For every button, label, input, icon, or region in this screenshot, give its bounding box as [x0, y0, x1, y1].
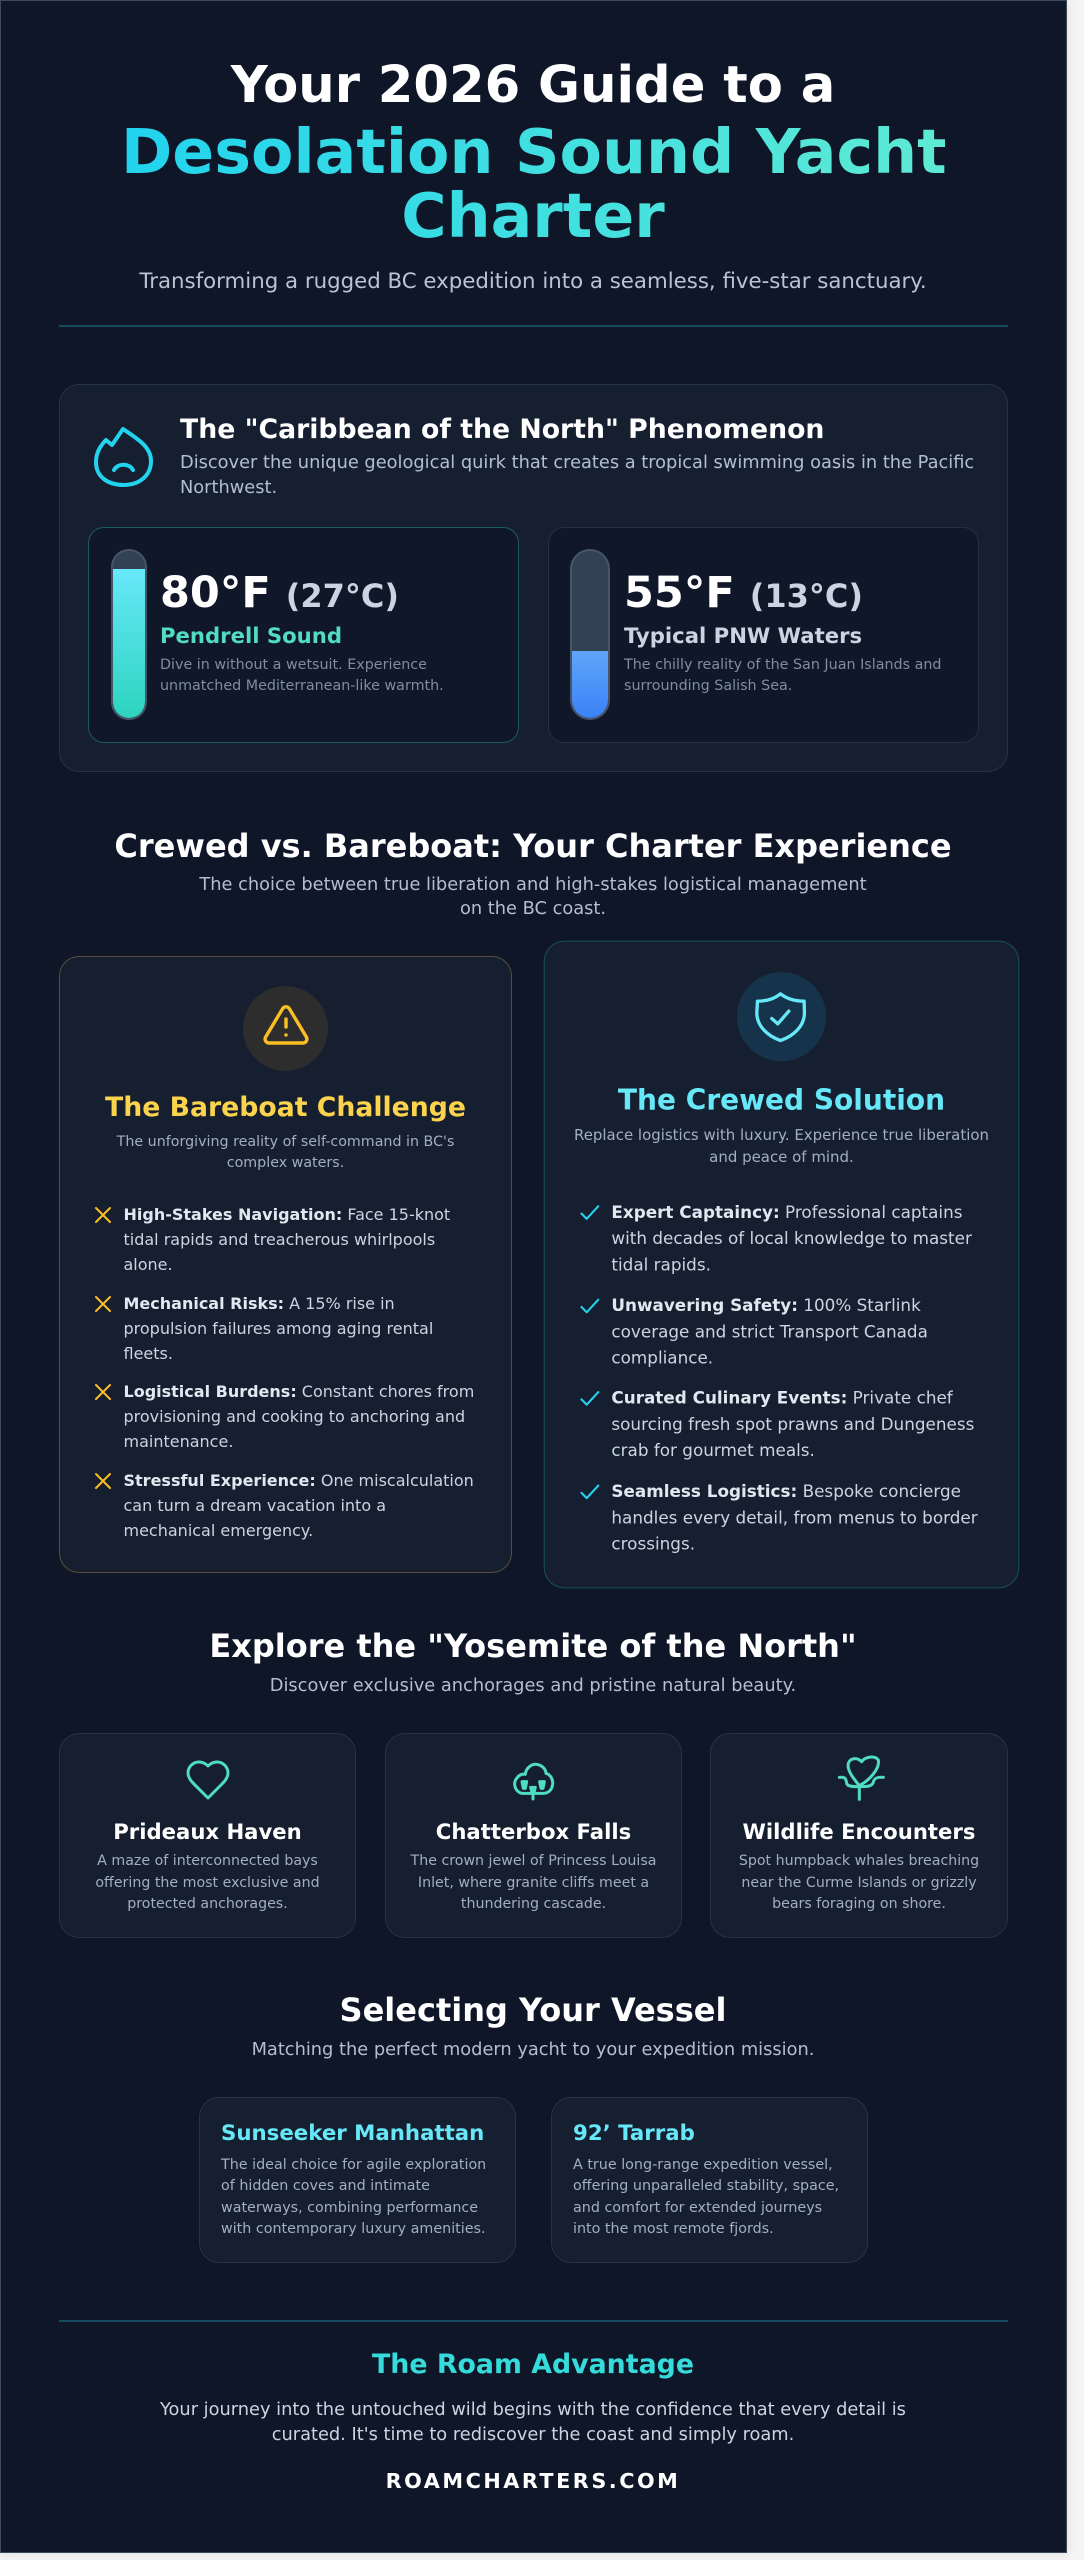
- card description: A maze of interconnected bays: [97, 1853, 318, 1869]
- PNW description: The chilly reality of the San Juan Islands and: [624, 657, 942, 673]
- benefit list: [580, 1202, 978, 1554]
- panel: Prideaux Haven: [59, 1733, 356, 1938]
- vessel description: waterways, combining performance: [221, 2200, 478, 2216]
- item: Seamless Logistics: crossings.: [611, 1534, 695, 1554]
- temperature reading: 55F: 55°F (13°C): [624, 568, 863, 618]
- heading: Selecting Your Vessel: Selecting Your Vessel: [340, 1991, 726, 2029]
- item: Unwavering Safety: Unwavering Safety: 100% Starlink: [611, 1295, 920, 1315]
- item: Curated Culinary Events: [580, 1388, 974, 1461]
- panel: Bareboat Challenge: [59, 956, 512, 1573]
- crewed description: Replace logistics with luxury. Experience true liberation: [573, 1127, 989, 1144]
- item: Mechanical Risks: fleets.: [124, 1344, 173, 1363]
- card description: Inlet, where granite cliffs meet a: [418, 1875, 649, 1891]
- Pendrell description: [160, 657, 444, 694]
- item: High-Stakes Navigation: High-Stakes Navigation: Face 15-knot: [124, 1205, 450, 1224]
- bareboat heading: The Bareboat Challenge: [105, 1092, 466, 1123]
- PNW description: [624, 657, 942, 694]
- phenomenon description: Northwest.: [180, 477, 277, 498]
- icon: warning triangle: [243, 986, 328, 1071]
- vessel description: into the most remote fjords.: [573, 2221, 774, 2237]
- card title: Prideaux Haven: [113, 1819, 302, 1844]
- card description: bears foraging on shore.: [772, 1896, 946, 1912]
- heading: Yosemite of the North: Explore the "Yosemite of the North": [209, 1627, 857, 1665]
- item: Stressful Experience: mechanical emergency.: [124, 1521, 313, 1540]
- phenomenon heading: The "Caribbean of the North" Phenomenon: [180, 414, 824, 445]
- item: Expert Captaincy: with decades of local knowledge to master: [611, 1228, 971, 1248]
- item: High-Stakes Navigation: alone.: [124, 1255, 173, 1274]
- card description: [410, 1853, 656, 1912]
- title gradient: Desolation Sound Yacht Charter: Desolation Sound Yacht: [121, 116, 947, 188]
- footer heading: The Roam Advantage: [372, 2349, 694, 2380]
- panel: Pendrell Sound temperature: [88, 527, 519, 743]
- vessel description: offering unparalleled stability, space,: [573, 2178, 839, 2194]
- item: Curated Culinary Events: sourcing fresh spot prawns and Dungeness: [611, 1415, 974, 1434]
- item: Curated Culinary Events: crab for gourmet meals.: [611, 1441, 814, 1461]
- location: Typical PNW Waters: Typical PNW Waters: [624, 623, 862, 648]
- card description: thundering cascade.: [461, 1896, 606, 1912]
- card description: near the Curme Islands or grizzly: [741, 1875, 977, 1891]
- title line: Your 2026 Guide to a: Your 2026 Guide to a: [231, 55, 835, 115]
- vessel title: Sunseeker Manhattan: [221, 2121, 484, 2146]
- website: ROAMCHARTERS.COM: [386, 2469, 680, 2493]
- bareboat description: complex waters.: [227, 1155, 344, 1171]
- panel: Caribbean of the North phenomenon: [59, 384, 1008, 772]
- item: Logistical Burdens: provisioning and cooking to anchoring and: [124, 1407, 465, 1426]
- item: High-Stakes Navigation: [95, 1205, 450, 1274]
- card description: [739, 1853, 979, 1912]
- Pendrell description: unmatched Mediterranean-like warmth.: [160, 678, 444, 694]
- item: Expert Captaincy: Expert Captaincy: Professional captains: [611, 1202, 962, 1222]
- footer: [160, 2349, 906, 2493]
- vessel title: 92’ Tarrab: [573, 2121, 695, 2146]
- section description: Discover exclusive anchorages and pristine natural beauty.: [270, 1675, 796, 1696]
- vessel description: [220, 2157, 486, 2237]
- phenomenon description: [180, 452, 974, 498]
- item: Seamless Logistics: handles every detail, from menus to border: [611, 1508, 977, 1528]
- section description: on the BC coast.: [460, 898, 606, 919]
- item: Curated Culinary Events: Curated Culinary Events: Private chef: [611, 1388, 952, 1408]
- PNW description: surrounding Salish Sea.: [624, 678, 792, 694]
- card title: Chatterbox Falls: [436, 1819, 631, 1844]
- title gradient: Desolation Sound Yacht Charter: Charter: [401, 180, 665, 252]
- card description: [95, 1853, 320, 1912]
- bareboat description: The unforgiving reality of self-command in BC's: [117, 1134, 454, 1150]
- panel: 92' Tarrab: [551, 2097, 868, 2263]
- panel: Wildlife Encounters: [710, 1733, 1008, 1938]
- item: Seamless Logistics: Seamless Logistics: Bespoke concierge: [611, 1481, 960, 1501]
- item: Logistical Burdens: Logistical Burdens: Constant chores from: [124, 1382, 474, 1401]
- phenomenon description: Discover the unique geological quirk that creates a tropical swimming oasis in the Pacific: [180, 452, 974, 473]
- card description: The crown jewel of Princess Louisa: [411, 1853, 656, 1869]
- item: Mechanical Risks: [95, 1294, 433, 1363]
- vessel description: with contemporary luxury amenities.: [221, 2221, 486, 2237]
- panel: Crewed Solution: [543, 941, 1019, 1588]
- card title: Wildlife Encounters: [743, 1819, 975, 1844]
- item: Mechanical Risks: Mechanical Risks: A 15% rise in: [124, 1294, 395, 1313]
- card description: protected anchorages.: [127, 1896, 288, 1912]
- crewed description: and peace of mind.: [709, 1150, 853, 1166]
- icon: shield check: [736, 972, 826, 1061]
- item: Seamless Logistics: [580, 1481, 978, 1554]
- crewed heading: The Crewed Solution: [617, 1084, 945, 1116]
- item: Mechanical Risks: propulsion failures among aging rental: [124, 1319, 433, 1338]
- vessel description: [573, 2157, 839, 2237]
- item: Logistical Burdens: maintenance.: [124, 1432, 233, 1451]
- title gradient: Desolation Sound Yacht Charter: [121, 116, 947, 252]
- card description: Spot humpback whales breaching: [739, 1853, 979, 1869]
- item: Logistical Burdens: [95, 1382, 474, 1451]
- vessel description: A true long-range expedition vessel,: [573, 2157, 833, 2173]
- section description: The choice between true liberation and high-stakes logistical management: [199, 874, 867, 895]
- item: Unwavering Safety: [580, 1295, 927, 1368]
- subtitle: Transforming a rugged BC expedition into a seamless, five-star sanctuary.: [139, 269, 927, 294]
- bareboat description: [116, 1134, 454, 1171]
- card description: offering the most exclusive and: [95, 1875, 320, 1891]
- crewed description: [573, 1127, 989, 1166]
- item: Expert Captaincy: tidal rapids.: [611, 1255, 710, 1274]
- vessel description: of hidden coves and intimate: [221, 2178, 430, 2194]
- vessel description: The ideal choice for agile exploration: [221, 2157, 486, 2173]
- icon: flower: [838, 1756, 885, 1801]
- section description: Matching the perfect modern yacht to your expedition mission.: [252, 2039, 814, 2060]
- heading: Crewed vs Bareboat: Crewed vs. Bareboat: Your Charter Experience: [114, 827, 952, 865]
- risk list: [95, 1205, 474, 1540]
- thermometer: 55F: [570, 549, 610, 720]
- item: Stressful Experience: [95, 1471, 474, 1540]
- panel: Sunseeker Manhattan: [199, 2097, 516, 2263]
- temperature reading: 80F: 80°F (27°C): [160, 568, 399, 618]
- location: Pendrell Sound: Pendrell Sound: [160, 623, 342, 648]
- item: Unwavering Safety: coverage and strict Transport Canada: [611, 1321, 927, 1341]
- item: Unwavering Safety: compliance.: [611, 1348, 713, 1368]
- item: Stressful Experience: can turn a dream vacation into a: [124, 1496, 386, 1515]
- footer text: [160, 2399, 906, 2445]
- panel: Chatterbox Falls: [385, 1733, 682, 1938]
- icon: flame: [94, 426, 153, 487]
- Pendrell description: Dive in without a wetsuit. Experience: [160, 657, 427, 673]
- icon: cloud with falls: [513, 1762, 554, 1800]
- item: High-Stakes Navigation: tidal rapids and treacherous whirlpools: [124, 1230, 435, 1249]
- panel: typical PNW temperature: [548, 527, 979, 743]
- section description: [199, 874, 867, 919]
- item: Expert Captaincy: [580, 1202, 972, 1274]
- item: Stressful Experience: Stressful Experience: One miscalculation: [124, 1471, 474, 1490]
- footer text: Your journey into the untouched wild begins with the confidence that every detail is: [160, 2399, 906, 2420]
- thermometer: 80F: [111, 549, 147, 720]
- vessel description: and comfort for extended journeys: [573, 2200, 822, 2216]
- footer text: curated. It's time to rediscover the coast and simply roam.: [272, 2424, 794, 2445]
- icon: heart: [186, 1760, 230, 1800]
- header: [121, 55, 947, 294]
